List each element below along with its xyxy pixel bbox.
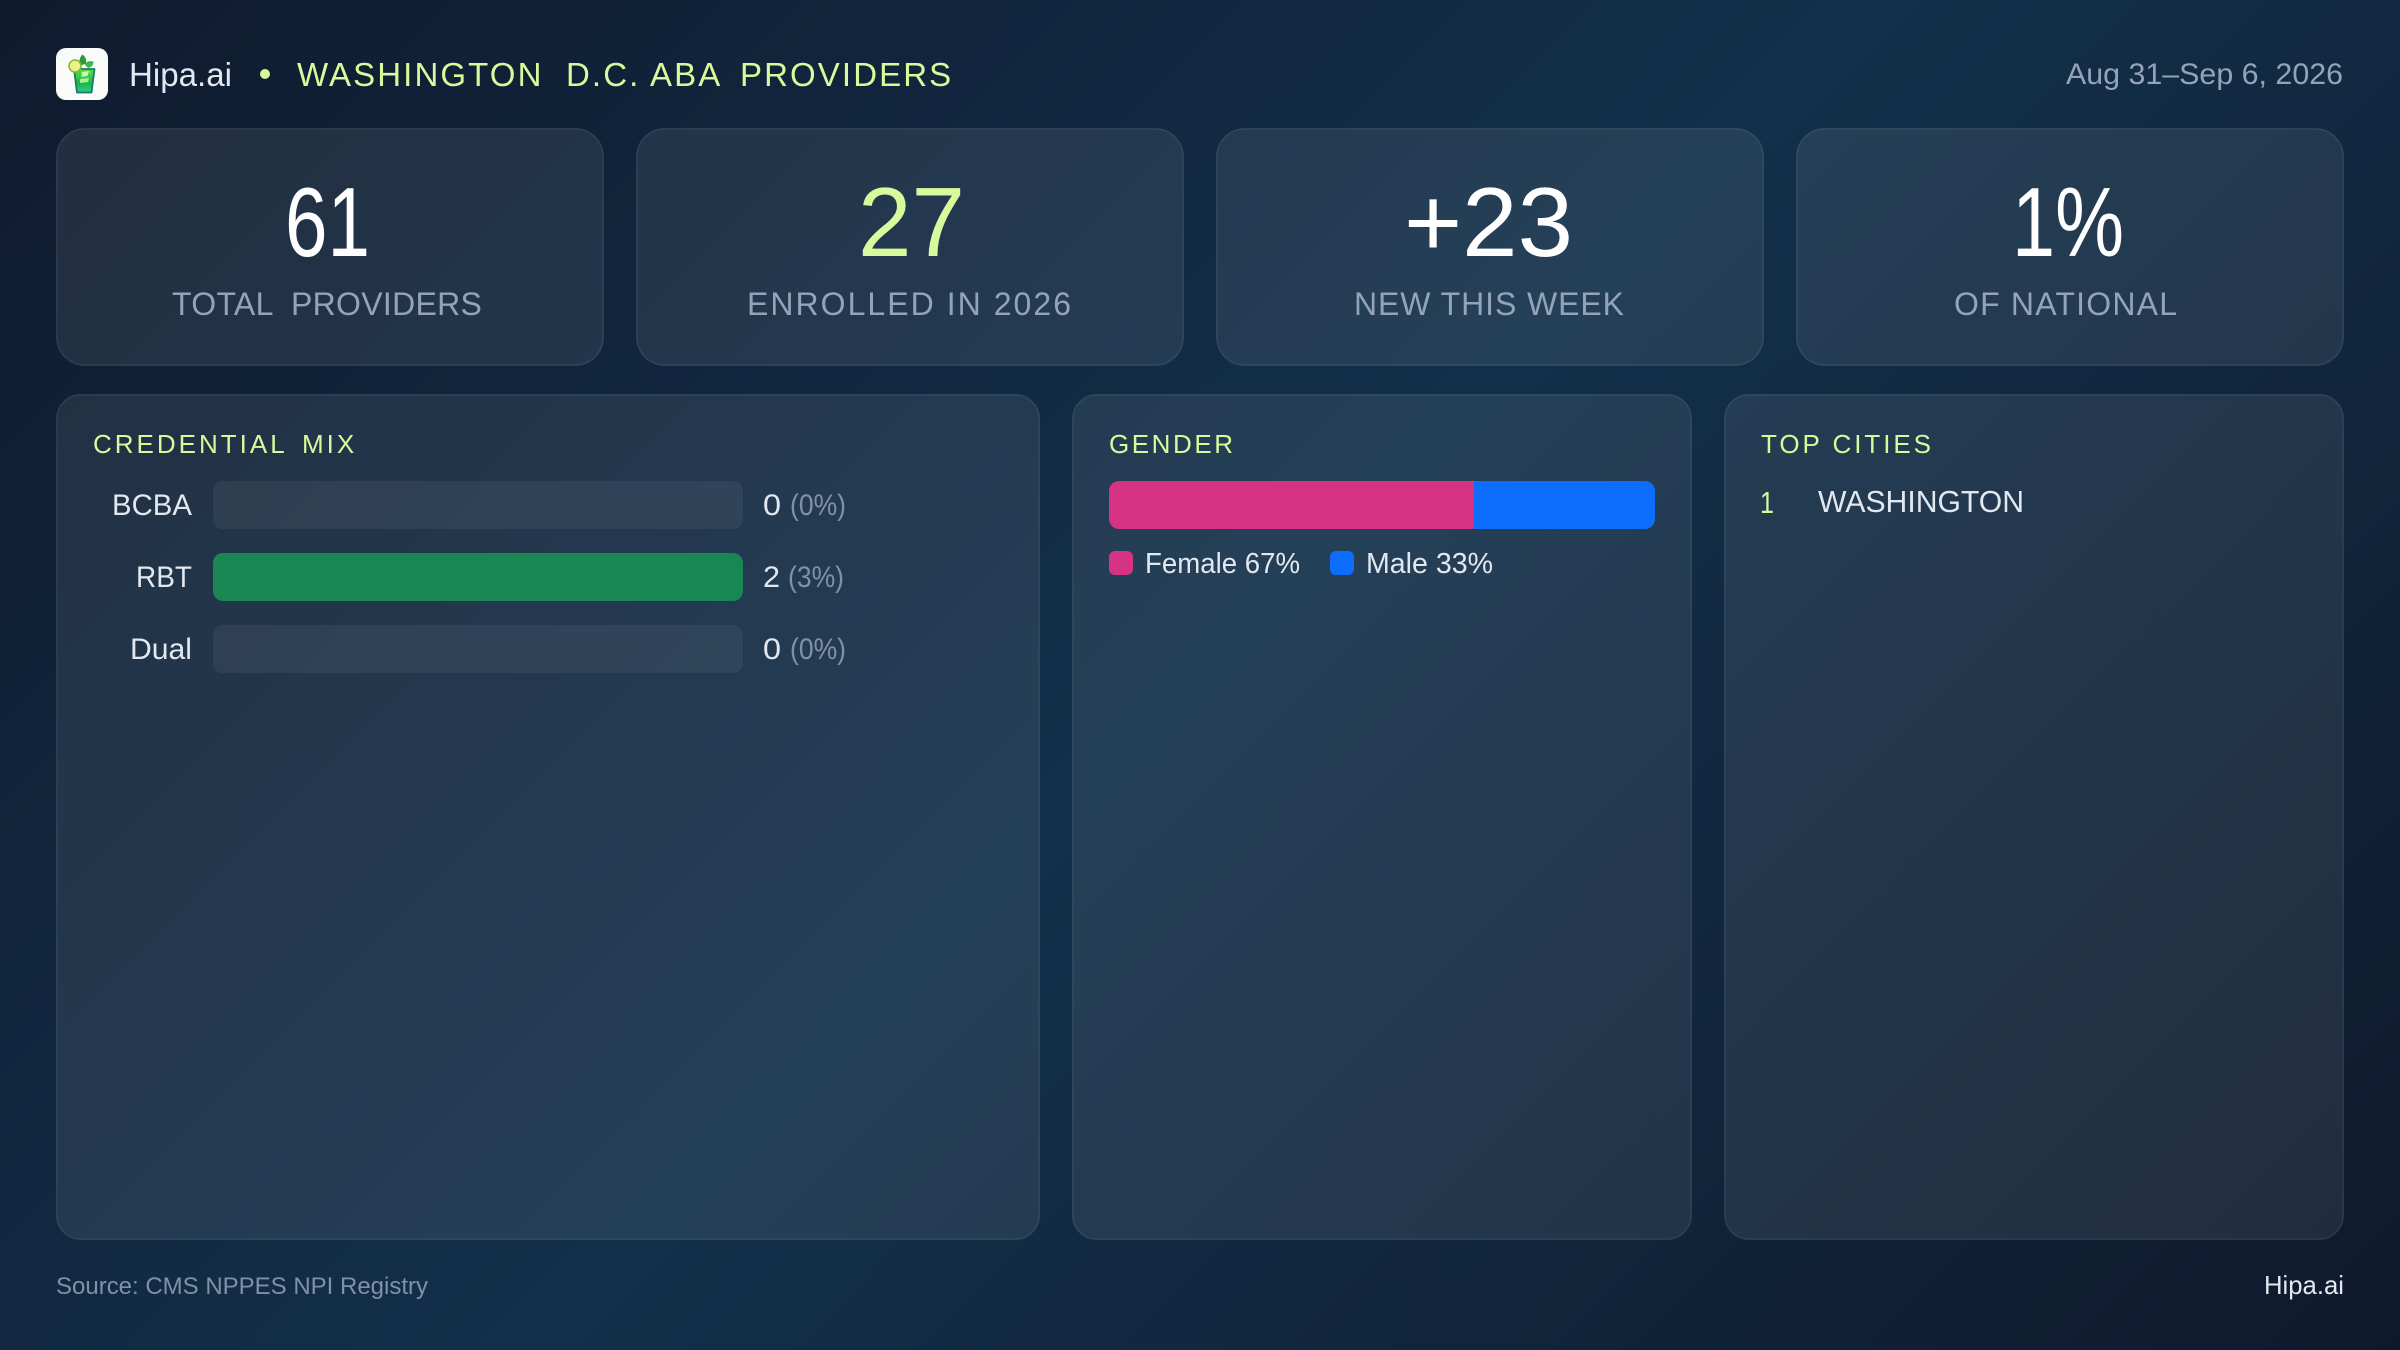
stat card: enrolled in 2026: 27 bbox=[858, 167, 965, 277]
bar row: BCBA: BCBA bbox=[112, 489, 192, 522]
bar row: BCBA: (0%) bbox=[790, 489, 846, 522]
panel: gender bbox=[1073, 395, 1691, 1239]
stat card: total providers: TOTAL bbox=[172, 286, 273, 322]
title: D.C. bbox=[566, 56, 640, 93]
stat card: new this week: NEW THIS WEEK bbox=[1354, 286, 1624, 322]
panel heading: GENDER bbox=[1109, 429, 1233, 459]
title: WASHINGTON bbox=[297, 56, 544, 93]
footer brand: Hipa.ai bbox=[2264, 1270, 2344, 1300]
bar row: Dual: Dual bbox=[130, 633, 192, 666]
bar row: RBT: (3%) bbox=[788, 561, 844, 594]
title: ABA bbox=[650, 56, 721, 93]
stat card: total providers bbox=[57, 129, 603, 365]
footer source: Source: CMS NPPES NPI Registry bbox=[56, 1273, 428, 1300]
icon: mojito glass logo bbox=[56, 48, 108, 100]
legend: female: Female 67% bbox=[1145, 548, 1300, 580]
bar row: RBT bbox=[136, 553, 844, 601]
title: PROVIDERS bbox=[740, 56, 953, 93]
stat card: total providers: 61 bbox=[285, 167, 370, 277]
header bbox=[56, 48, 2343, 100]
panel heading: CREDENTIAL bbox=[93, 429, 287, 459]
stat card: new this week: +23 bbox=[1404, 167, 1573, 277]
city rank: 1 bbox=[1760, 485, 1774, 520]
panel heading: TOP CITIES bbox=[1761, 429, 1931, 459]
brand name: Hipa.ai bbox=[129, 56, 232, 93]
bullet separator bbox=[260, 69, 270, 79]
city name: WASHINGTON bbox=[1818, 484, 2024, 519]
bar row: RBT: 2 bbox=[763, 561, 780, 594]
stat card: of national bbox=[1797, 129, 2343, 365]
bar row: BCBA bbox=[112, 481, 846, 529]
stat card: enrolled in 2026 bbox=[637, 129, 1183, 365]
panel: top cities bbox=[1725, 395, 2343, 1239]
bar row: Dual bbox=[130, 625, 846, 673]
stat card: of national: 1% bbox=[2012, 167, 2124, 277]
bar row: Dual: 0 bbox=[763, 633, 781, 666]
legend: male: Male 33% bbox=[1366, 548, 1493, 580]
stat card: of national: OF NATIONAL bbox=[1954, 286, 2177, 322]
stat card: enrolled in 2026: ENROLLED IN 2026 bbox=[747, 286, 1071, 322]
date range: Aug 31–Sep 6, 2026 bbox=[2066, 58, 2343, 91]
bar row: BCBA: 0 bbox=[763, 489, 781, 522]
panel: credential mix bbox=[57, 395, 1039, 1239]
stacked gender bar bbox=[1109, 481, 1655, 529]
stat card: total providers: PROVIDERS bbox=[291, 286, 482, 322]
panel heading: MIX bbox=[302, 429, 357, 459]
bar row: Dual: (0%) bbox=[790, 633, 846, 666]
stat card: new this week bbox=[1217, 129, 1763, 365]
bar row: RBT: RBT bbox=[136, 561, 192, 594]
